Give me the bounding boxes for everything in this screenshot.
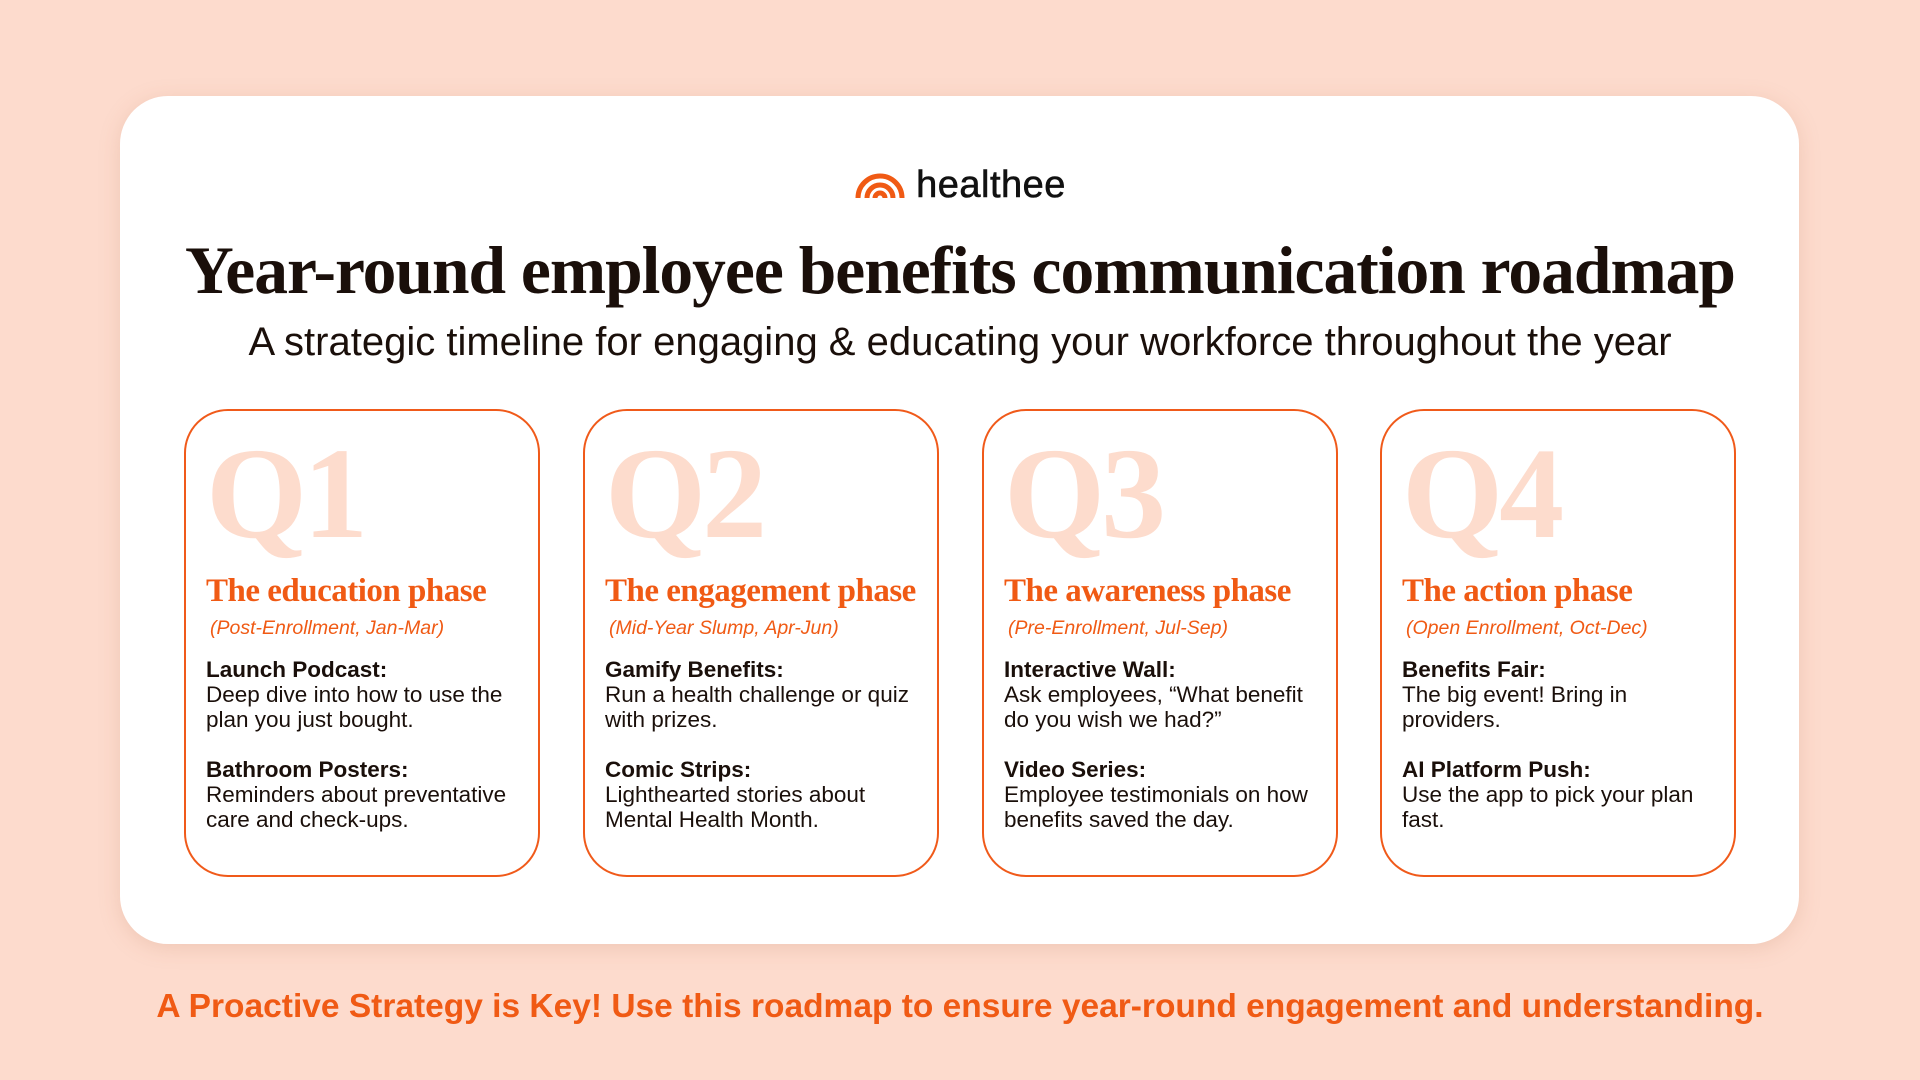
panel: Q2: Comic Strips: <box>605 757 751 782</box>
panel: Q4: Benefits Fair: <box>1402 657 1546 682</box>
panel: Q1: Launch Podcast: <box>206 657 387 682</box>
panel: Q1 <box>184 409 540 877</box>
panel: Q3: do you wish we had?” <box>1004 707 1222 732</box>
panel: Q2: with prizes. <box>605 707 718 732</box>
panel: Q3: The awareness phase <box>1004 573 1291 609</box>
panel: Q3 <box>982 409 1338 877</box>
footer callout: A Proactive Strategy is Key! Use this roadmap to ensure year-round engagement and understanding. <box>156 988 1764 1025</box>
panel: Q2: The engagement phase <box>605 573 916 609</box>
panel: Q2: (Mid-Year Slump, Apr-Jun) <box>609 617 839 639</box>
panel: Q3: (Pre-Enrollment, Jul-Sep) <box>1008 617 1228 639</box>
panel: Q1: Reminders about preventative <box>206 782 506 807</box>
panel: Q4: (Open Enrollment, Oct-Dec) <box>1406 617 1648 639</box>
logo: healthee <box>916 164 1066 206</box>
panel: Q1: Q1 <box>206 422 364 566</box>
icon: rainbow arcs <box>856 174 904 198</box>
panel: Q1: Deep dive into how to use the <box>206 682 502 707</box>
panel: Q4: The action phase <box>1402 573 1632 609</box>
title: Year-round employee benefits communication roadmap <box>185 233 1735 308</box>
panel: Q4: Q4 <box>1402 422 1560 566</box>
panel: Q3: Interactive Wall: <box>1004 657 1176 682</box>
panel: Q2: Lighthearted stories about <box>605 782 865 807</box>
panel: Q4: The big event! Bring in <box>1402 682 1627 707</box>
panel: Q3: Q3 <box>1004 422 1162 566</box>
panel: Q4 <box>1380 409 1736 877</box>
panel: Q4: fast. <box>1402 807 1445 832</box>
white panel <box>120 96 1799 944</box>
panel: Q3: benefits saved the day. <box>1004 807 1234 832</box>
panel: Q4: providers. <box>1402 707 1501 732</box>
panel: Q1: The education phase <box>206 573 486 609</box>
panel: Q4: Use the app to pick your plan <box>1402 782 1693 807</box>
panel: Q3: Video Series: <box>1004 757 1146 782</box>
panel: Q3: Employee testimonials on how <box>1004 782 1308 807</box>
panel: Q2: Gamify Benefits: <box>605 657 784 682</box>
panel: Q2: Run a health challenge or quiz <box>605 682 909 707</box>
panel: Q4: AI Platform Push: <box>1402 757 1591 782</box>
panel: Q3: Ask employees, “What benefit <box>1004 682 1303 707</box>
panel: Q1: Bathroom Posters: <box>206 757 409 782</box>
subtitle: A strategic timeline for engaging & educating your workforce throughout the year <box>248 320 1672 364</box>
panel: Q1: plan you just bought. <box>206 707 414 732</box>
panel: Q2 <box>583 409 939 877</box>
panel: Q2: Mental Health Month. <box>605 807 819 832</box>
panel: Q1: (Post-Enrollment, Jan-Mar) <box>210 617 444 639</box>
panel: Q2: Q2 <box>605 422 763 566</box>
panel: Q1: care and check-ups. <box>206 807 409 832</box>
